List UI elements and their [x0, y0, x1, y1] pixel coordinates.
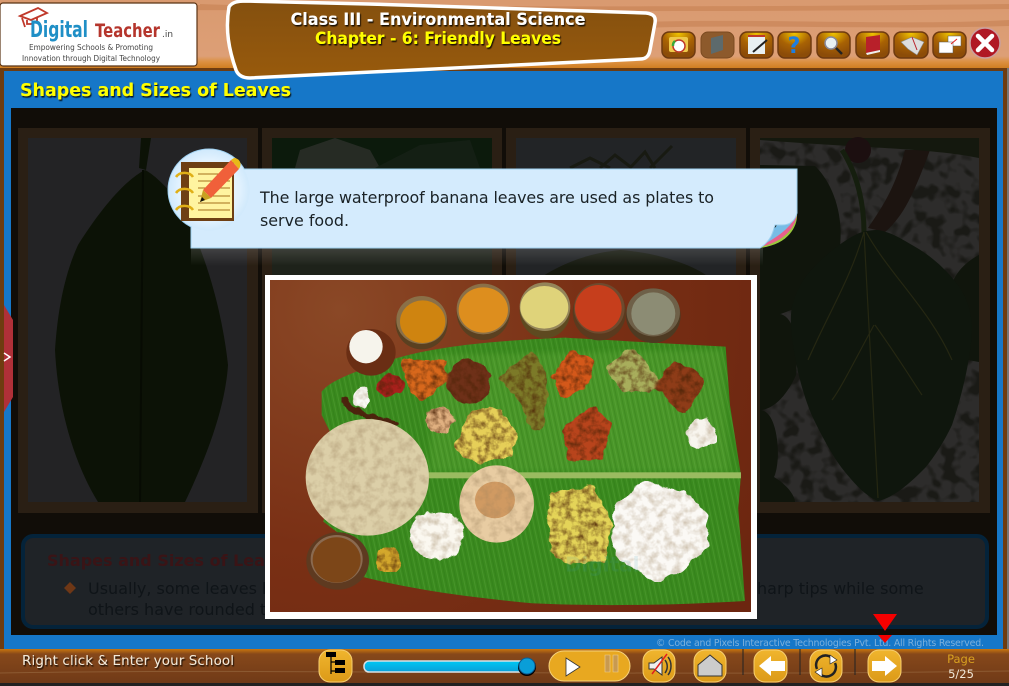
- callout: [168, 149, 797, 248]
- chapter title text: Class III - Environmental Science: [290, 10, 586, 29]
- pale food servings: [306, 386, 717, 582]
- icon: window resize: [933, 32, 966, 58]
- page label: Page: [947, 652, 975, 666]
- icon: help question mark: [778, 32, 811, 59]
- chapter title plank: [227, 1, 655, 78]
- dimmed stage background: [11, 108, 997, 635]
- icon: refresh button: [810, 650, 842, 682]
- icon: help question mark: ?: [788, 34, 800, 59]
- bottom control bar: [0, 649, 1009, 686]
- logo tagline: Empowering Schools & Promoting: [29, 43, 153, 52]
- icon: magnifier: [817, 32, 850, 58]
- icon: home button: [694, 650, 726, 682]
- photo watermark: Digital: [565, 553, 639, 577]
- dimmed text panel: [23, 536, 987, 627]
- callout corner fold: [760, 213, 797, 248]
- icon: close button: [970, 28, 1000, 58]
- dimmed leaf photo 4: [750, 128, 990, 513]
- icon: notepad with pencil: [176, 158, 241, 221]
- logo card: Teacher: [95, 20, 160, 42]
- progress slider: [364, 658, 536, 676]
- steel bowls: [306, 282, 681, 590]
- icon: reference book: [701, 32, 734, 58]
- panel body text: [88, 579, 924, 619]
- leaf midrib: [425, 472, 741, 478]
- toolbar icons: [662, 28, 1000, 59]
- panel body text: harp tips while some: [757, 579, 924, 598]
- panel body text: Usually, some leaves have pointed tips: [88, 579, 401, 598]
- callout text: The large waterproof banana leaves are used as plates to: [259, 188, 714, 207]
- panel body text: others have rounded tips.: [88, 600, 294, 619]
- left side tab: [4, 305, 13, 412]
- dimmed leaf photo 2: [262, 128, 502, 513]
- panel heading: Shapes and Sizes of Leaves: [47, 551, 296, 570]
- logo card: Innovation through Digital Technology: [22, 54, 160, 63]
- logo wordmark: Digital: [30, 18, 88, 43]
- copyright line: © Code and Pixels Interactive Technologies Pvt. Ltd. All Rights Reserved.: [656, 638, 984, 649]
- light shade below callout: [191, 248, 763, 266]
- icon: next arrow button: [868, 650, 901, 682]
- page number: 5/25: [948, 667, 974, 681]
- chapter title plank: Chapter - 6: Friendly Leaves: [315, 29, 561, 48]
- photo: banana leaf meal: [265, 275, 757, 619]
- icon: diamond bullet: [64, 582, 76, 594]
- icon: graduation cap: [20, 8, 47, 27]
- separators: [743, 649, 855, 675]
- wooden table: [270, 280, 751, 612]
- callout: serve food.: [260, 211, 349, 230]
- dimmed leaf photo 3: [506, 128, 746, 513]
- logo card: [0, 3, 197, 66]
- icon: dictionary: [856, 32, 889, 58]
- dimmed leaf photo 1: [18, 128, 258, 513]
- top wood header background: [0, 0, 1009, 72]
- banana leaf: [322, 338, 745, 605]
- food servings: [342, 347, 707, 572]
- icon: history folder: [662, 32, 695, 58]
- icon: site map button: [319, 650, 352, 682]
- red pointer arrow: [873, 614, 897, 643]
- pappadam: [306, 419, 429, 536]
- icon: open book: [894, 32, 928, 58]
- paratha: [459, 465, 534, 543]
- icon: back arrow button: [754, 650, 787, 682]
- school label: Right click & Enter your School: [22, 654, 234, 669]
- play and pause button: [549, 651, 630, 681]
- photo frame: [265, 275, 757, 619]
- icon: notepad and pen: [740, 32, 773, 58]
- icon: mute button: [643, 650, 675, 682]
- logo card: .in: [162, 30, 173, 40]
- section heading: Shapes and Sizes of Leaves: [20, 80, 291, 101]
